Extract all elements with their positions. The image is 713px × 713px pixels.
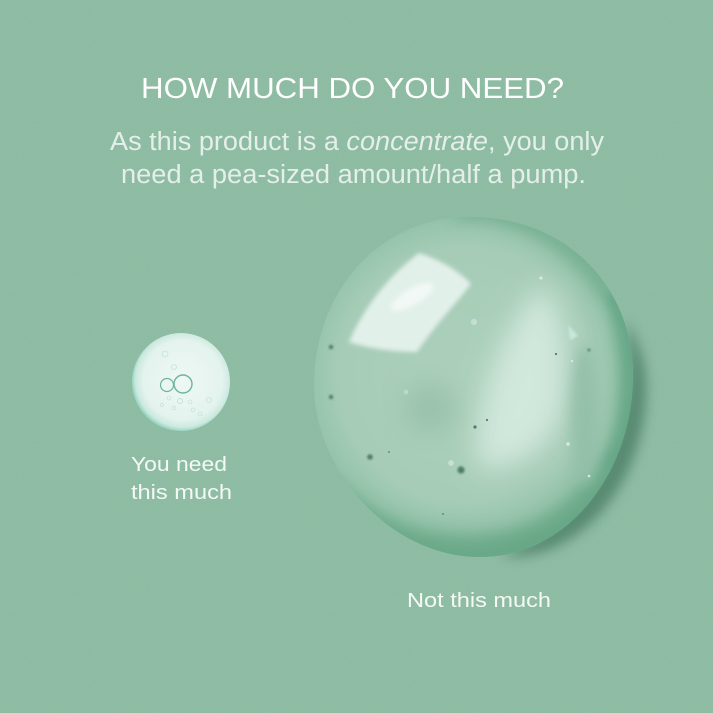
label: you need this much: this much — [131, 481, 232, 504]
label: not this much: Not this much — [407, 589, 551, 612]
infographic canvas — [110, 78, 652, 607]
intro text: As this product is a concentrate , you only — [110, 128, 604, 156]
drop shadow — [500, 320, 646, 557]
small drop: you need this much — [132, 333, 230, 431]
bright reflection notch on right — [568, 325, 578, 340]
label: you need this much — [131, 453, 232, 504]
specks in the liquid — [329, 345, 590, 515]
intro text: need a pea-sized amount/half a pump. — [121, 161, 586, 189]
drop body — [314, 217, 633, 557]
drop shading — [357, 217, 633, 556]
title: HOW MUCH DO YOU NEED? — [141, 73, 564, 105]
small drop bubbles — [160, 351, 212, 416]
large drop: not this much — [314, 200, 650, 565]
label: you need this much: You need — [131, 453, 227, 476]
intro text — [110, 128, 604, 189]
glossy highlight — [349, 253, 471, 352]
small bubbles — [404, 276, 590, 477]
